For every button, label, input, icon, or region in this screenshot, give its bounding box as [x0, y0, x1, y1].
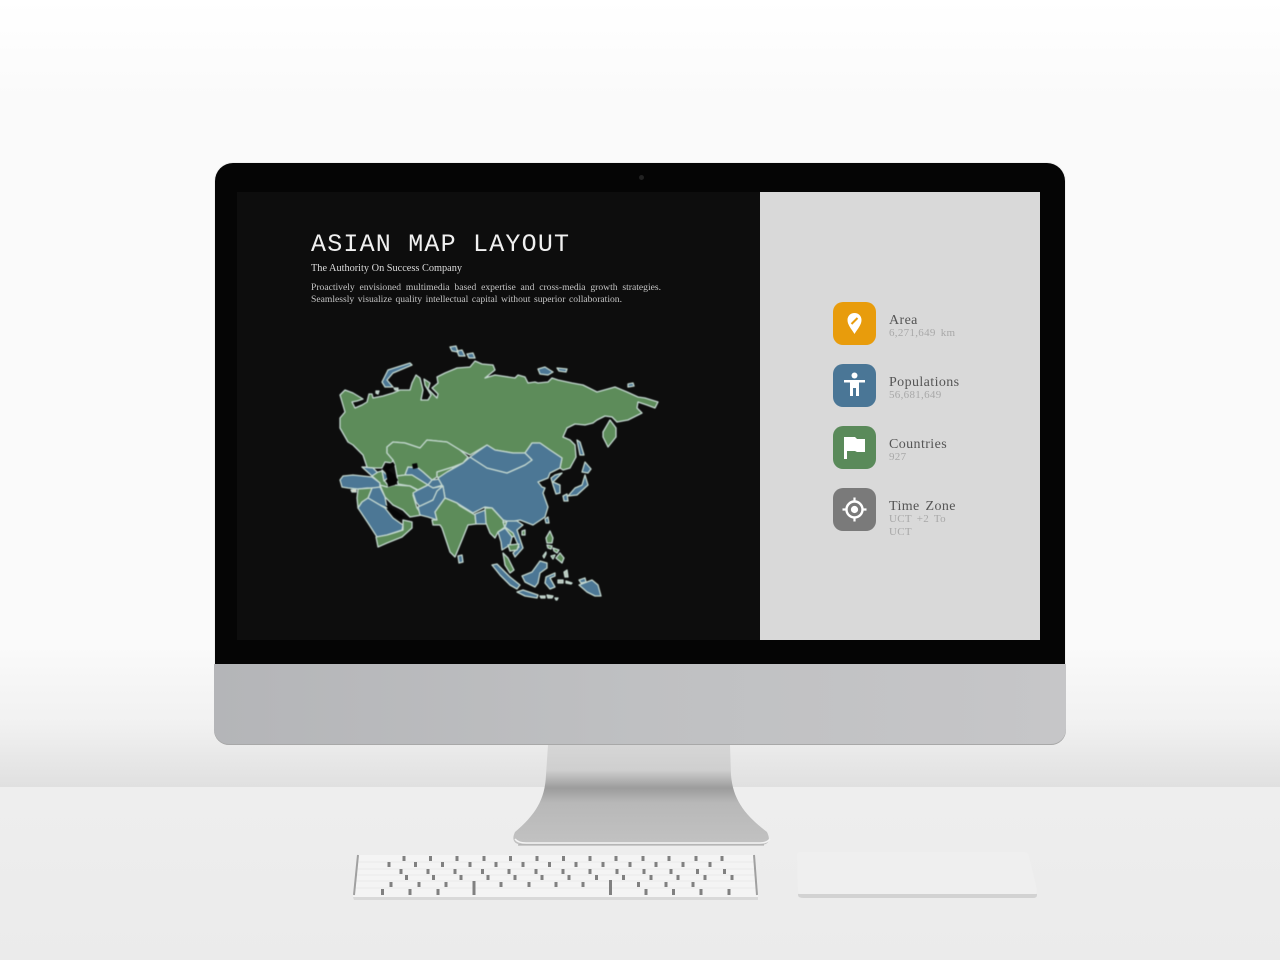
value: Countries: 927 [889, 451, 906, 463]
slide: dark screen area [237, 192, 760, 640]
region: Sakhalin [577, 440, 584, 455]
region: Philippines [543, 531, 564, 563]
region: Syria and Jordan [357, 488, 372, 508]
region: Georgia [362, 467, 378, 476]
region: Mongolia [470, 445, 532, 473]
region: Afghanistan [413, 485, 443, 507]
value: Time Zone: UCT +2 To [889, 513, 946, 525]
region: Iraq [368, 487, 387, 508]
map of Asia [338, 344, 660, 602]
item: Time Zone [833, 488, 956, 538]
monitor bezel [215, 163, 1065, 665]
region: Yemen and Oman [376, 520, 412, 547]
region: small islands [376, 388, 572, 600]
body text [311, 282, 661, 305]
region: Kamchatka [603, 420, 616, 447]
region: Laos [503, 522, 518, 537]
region: Aral Sea [412, 463, 418, 469]
region: Armenia [372, 471, 389, 487]
region: Russia [340, 361, 658, 470]
item: Countries [833, 426, 947, 469]
region: New Guinea [579, 578, 601, 596]
region: Arctic islands [450, 346, 634, 387]
region: China [438, 443, 562, 525]
region: Malay peninsula [503, 553, 514, 573]
value: Time Zone: UCT [889, 526, 912, 538]
region: Java [517, 590, 538, 598]
webcam [639, 175, 644, 180]
value: Area: 6,271,649 km [889, 326, 955, 338]
body text: Proactively envisioned multimedia based expertise and cross-media growth strategies. [311, 282, 661, 293]
region: Sumatra [492, 564, 520, 589]
region: Taiwan [545, 517, 549, 523]
region: Uzbekistan [405, 467, 432, 485]
monitor [214, 162, 1066, 745]
region: Kyrgyzstan [437, 467, 453, 478]
region: Japan [563, 462, 591, 501]
region: Thailand [498, 528, 512, 550]
region: Myanmar [485, 508, 505, 538]
icon: target [833, 488, 876, 531]
region: Tajikistan [428, 479, 443, 488]
region: Caspian Sea [383, 462, 398, 487]
region: Sri Lanka [458, 555, 463, 563]
value: Populations: 56,681,649 [889, 388, 942, 400]
region: Korea [551, 473, 562, 494]
subtitle: The Authority On Success Company [311, 263, 462, 274]
item: Area [833, 302, 955, 345]
region: Novaya Zemlya [382, 363, 412, 387]
region: Vietnam [505, 521, 523, 557]
region: Hainan [522, 530, 525, 535]
region: India [432, 498, 476, 557]
title: ASIAN MAP LAYOUT [311, 230, 570, 259]
region: Azerbaijan [382, 470, 389, 481]
region: Persian Gulf [385, 505, 405, 519]
region: Saudi Arabia [358, 498, 403, 537]
monitor chin [214, 664, 1066, 745]
trackpad [798, 894, 1037, 898]
value: Time Zone [889, 513, 946, 538]
region: Sulawesi [545, 573, 555, 589]
region: Bangladesh [475, 510, 487, 524]
region: Iran [380, 485, 422, 517]
keyboard [353, 854, 758, 900]
icon: person [833, 364, 876, 407]
region: Cambodia [508, 544, 519, 551]
label: Populations: Populations [889, 374, 960, 390]
region: Cyprus [351, 489, 356, 492]
label: Time Zone: Time Zone [889, 498, 956, 514]
item: Populations [833, 364, 960, 407]
label: Countries: Countries [889, 436, 947, 452]
region: Kazakhstan [387, 440, 468, 480]
label: Area: Area [889, 312, 918, 328]
body text: Seamlessly visualize quality intellectual capital without superior collaboration. [311, 294, 622, 305]
region: Borneo [522, 561, 547, 587]
icon: flag [833, 426, 876, 469]
region: Turkmenistan [397, 475, 428, 490]
icon: map pin [833, 302, 876, 345]
region: Pakistan [418, 486, 445, 520]
panel: grey info sidebar [760, 192, 1040, 640]
region: Turkey [340, 475, 380, 489]
monitor stand [513, 745, 769, 846]
